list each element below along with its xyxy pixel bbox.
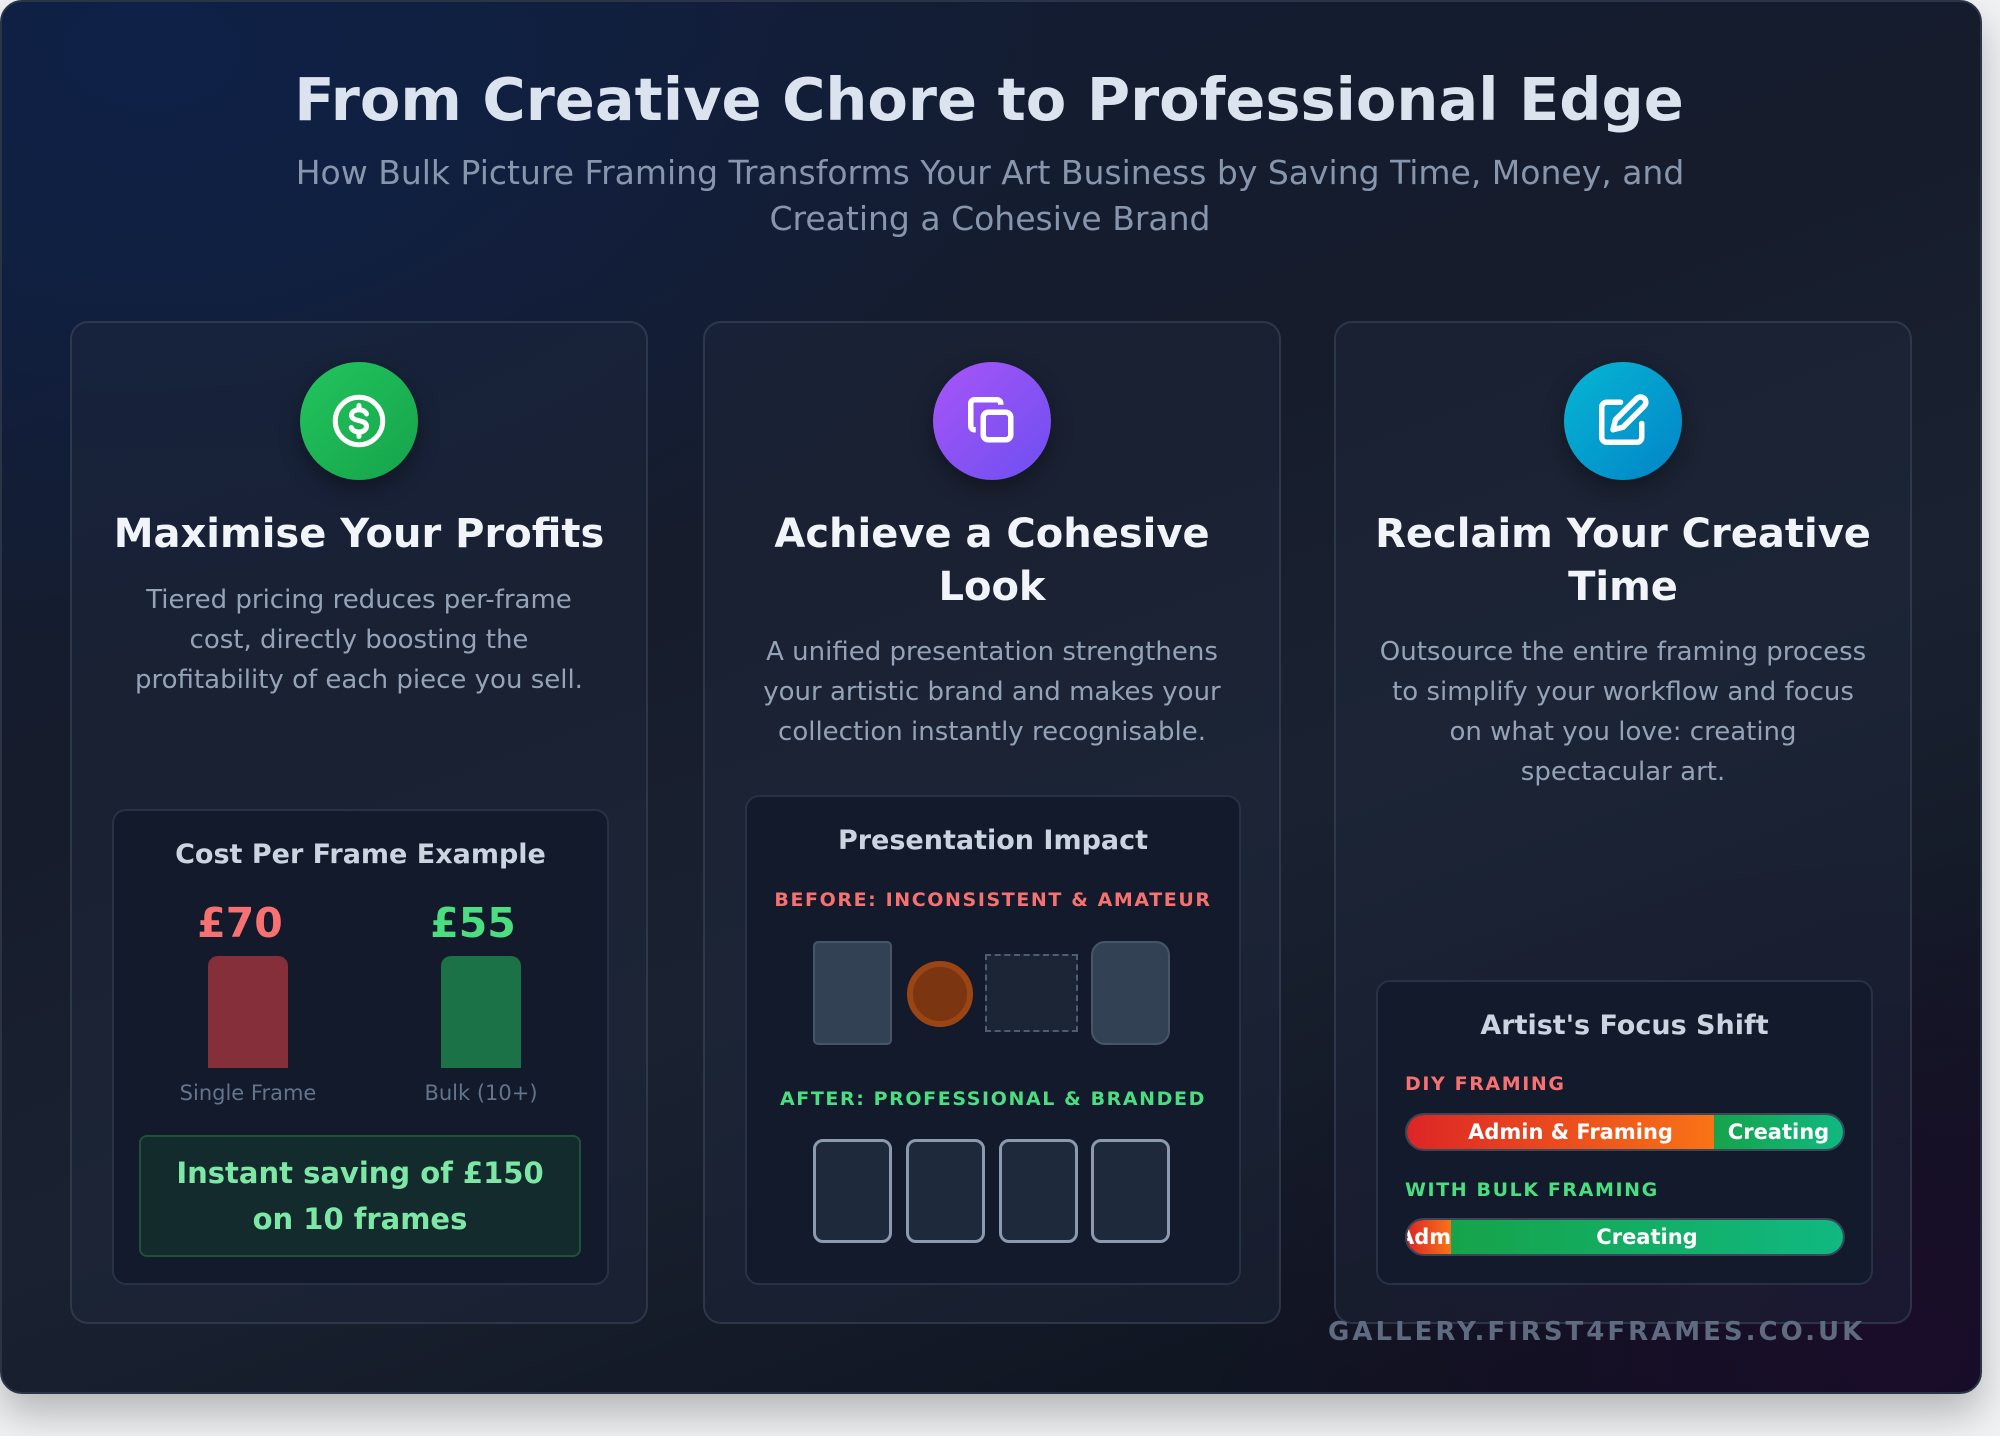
description: Tiered pricing reduces per-frame cost, directly boosting the profitability of each piece you sell. <box>135 585 583 695</box>
icon: copy <box>933 362 1051 480</box>
subtitle: How Bulk Picture Framing Transforms Your Art Business by Saving Time, Money, and Creating a Cohesive Brand <box>296 153 1684 238</box>
panel: cohesive look <box>703 321 1281 1324</box>
bar: diy <box>1405 1113 1845 1151</box>
label: bulk: Bulk (10+) <box>424 1081 538 1105</box>
icon: edit <box>1564 362 1682 480</box>
label: bulk: WITH BULK FRAMING <box>1405 1179 1659 1201</box>
bar: diy: Admin & Framing <box>1468 1120 1673 1144</box>
callout: saving: on 10 frames <box>253 1202 467 1236</box>
heading <box>774 511 1210 610</box>
heading: Achieve a Cohesive <box>774 511 1210 557</box>
label: before: BEFORE: INCONSISTENT & AMATEUR <box>774 889 1212 911</box>
bar: diy: Creating <box>1728 1120 1829 1144</box>
subpanel title: Cost Per Frame Example <box>175 839 546 870</box>
bar: bulk <box>441 956 521 1068</box>
heading: Maximise Your Profits <box>114 511 604 557</box>
panel: creative time <box>1334 321 1912 1324</box>
label: after: AFTER: PROFESSIONAL & BRANDED <box>780 1088 1206 1110</box>
bar: single <box>208 956 288 1068</box>
subpanel: cost per frame <box>112 809 609 1285</box>
footer url: GALLERY.FIRST4FRAMES.CO.UK <box>1328 1317 1865 1347</box>
callout: saving <box>139 1135 581 1257</box>
callout: saving: Instant saving of £150 <box>176 1156 544 1190</box>
subpanel: focus shift <box>1376 980 1873 1285</box>
price: single: £70 <box>197 899 283 947</box>
subpanel: presentation impact <box>745 795 1241 1285</box>
after frames <box>813 1139 1170 1243</box>
heading: Reclaim Your Creative <box>1375 511 1871 557</box>
heading: Look <box>938 564 1046 610</box>
label: diy: DIY FRAMING <box>1405 1073 1566 1095</box>
panel: profits <box>70 321 648 1324</box>
bar: bulk: Creating <box>1596 1225 1698 1249</box>
description: A unified presentation strengthens your artistic brand and makes your collection instantly recognisable. <box>763 637 1221 747</box>
description: Outsource the entire framing process to simplify your workflow and focus on what you love: creating spectacular art. <box>1380 637 1866 787</box>
label: single: Single Frame <box>180 1081 316 1105</box>
icon: dollar <box>300 362 418 480</box>
heading <box>1375 511 1871 610</box>
before frames <box>813 941 1170 1045</box>
bar: bulk <box>1405 1218 1845 1256</box>
heading: Time <box>1568 564 1678 610</box>
subpanel title: Presentation Impact <box>838 825 1148 856</box>
price: bulk: £55 <box>430 899 516 947</box>
title: From Creative Chore to Professional Edge <box>294 65 1684 134</box>
subpanel title: Artist's Focus Shift <box>1480 1010 1769 1041</box>
